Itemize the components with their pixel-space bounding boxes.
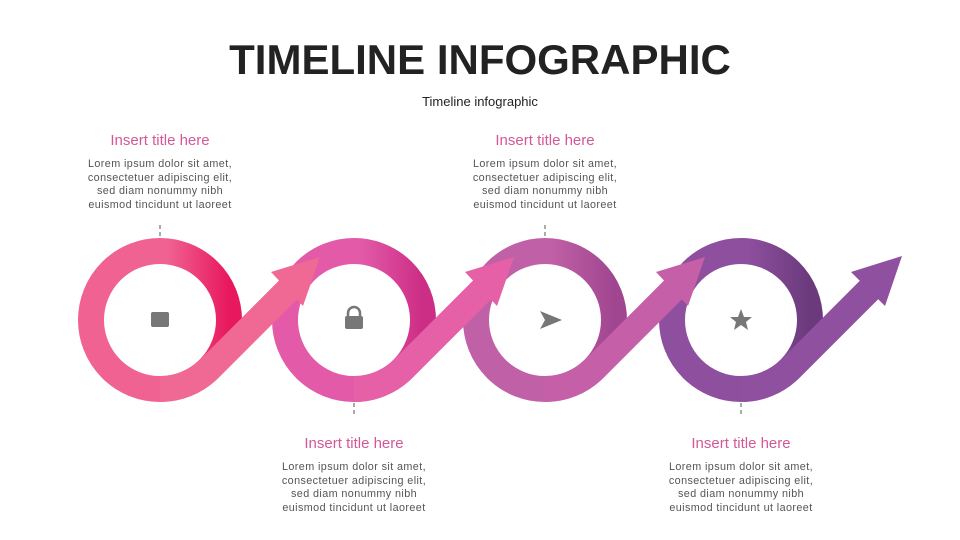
text block 1: Insert title here bbox=[110, 132, 210, 149]
text block 3: euismod tincidunt ut laoreet bbox=[473, 199, 617, 211]
text block 1: sed diam nonummy nibh bbox=[97, 185, 223, 197]
icon: star bbox=[730, 309, 752, 330]
text block 4: sed diam nonummy nibh bbox=[678, 488, 804, 500]
text block 2: consectetuer adipiscing elit, bbox=[282, 475, 426, 487]
text block 2: Insert title here bbox=[304, 435, 404, 452]
text block 3: consectetuer adipiscing elit, bbox=[473, 172, 617, 184]
text block 2: euismod tincidunt ut laoreet bbox=[282, 502, 426, 514]
text block 3: Insert title here bbox=[495, 132, 595, 149]
text block 3: Lorem ipsum dolor sit amet, bbox=[473, 158, 617, 170]
icon: card bbox=[151, 312, 169, 327]
text block 3: sed diam nonummy nibh bbox=[482, 185, 608, 197]
text block 2: Lorem ipsum dolor sit amet, bbox=[282, 461, 426, 473]
text block 4: consectetuer adipiscing elit, bbox=[669, 475, 813, 487]
text block 1: consectetuer adipiscing elit, bbox=[88, 172, 232, 184]
text block 2 bbox=[282, 435, 426, 514]
text block 1 bbox=[88, 132, 232, 211]
text block 1: Lorem ipsum dolor sit amet, bbox=[88, 158, 232, 170]
text block 1: euismod tincidunt ut laoreet bbox=[88, 199, 232, 211]
text block 3 bbox=[473, 132, 617, 211]
text block 4: Lorem ipsum dolor sit amet, bbox=[669, 461, 813, 473]
rings bbox=[91, 251, 810, 389]
text block 2: sed diam nonummy nibh bbox=[291, 488, 417, 500]
title: TIMELINE INFOGRAPHIC bbox=[229, 36, 731, 83]
text block 4 bbox=[669, 435, 813, 514]
icon: send bbox=[540, 311, 562, 329]
subtitle: Timeline infographic bbox=[422, 94, 538, 109]
arrows bbox=[160, 256, 902, 389]
icon: lock bbox=[345, 307, 363, 329]
text block 4: euismod tincidunt ut laoreet bbox=[669, 502, 813, 514]
text block 4: Insert title here bbox=[691, 435, 791, 452]
